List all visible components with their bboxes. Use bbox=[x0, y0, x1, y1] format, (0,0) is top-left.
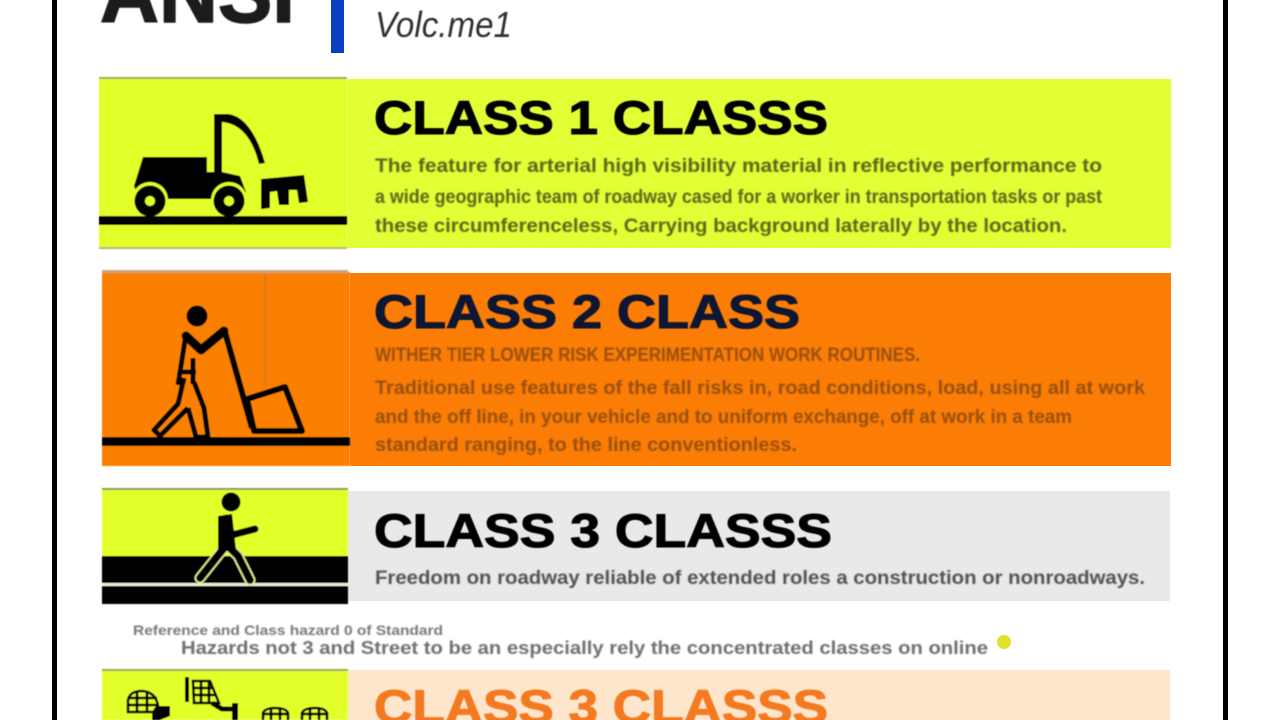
footnote second line: Hazards not 3 and Street to be an especially rely the concentrated classes on online bbox=[181, 638, 988, 658]
class 4 background bbox=[348, 670, 1170, 720]
class 3 description: Freedom on roadway reliable of extended roles a construction or nonroadways. bbox=[375, 568, 1145, 589]
panel: class 4 bbox=[102, 669, 1170, 720]
class 3 heading: CLASS 3 CLASSS bbox=[374, 504, 832, 557]
footnote bbox=[133, 622, 1011, 658]
footnote first line: Reference and Class hazard 0 of Standard bbox=[133, 622, 443, 638]
icon: worker pushing cart bbox=[102, 270, 350, 466]
class 2 description: standard ranging, to the line conventionless. bbox=[375, 435, 797, 456]
icon: yellow dot bbox=[997, 635, 1011, 649]
class 2 heading: CLASS 2 CLASS bbox=[374, 285, 800, 338]
class 2 description: and the off line, in your vehicle and to uniform exchange, off at work in a team bbox=[375, 407, 1072, 428]
class 1 description: these circumferenceless, Carrying background laterally by the location. bbox=[375, 216, 1067, 237]
class 1 description: a wide geographic team of roadway cased for a worker in transportation tasks or past bbox=[375, 187, 1103, 208]
panel: class 3 bbox=[102, 488, 1170, 604]
class 2 description: Traditional use features of the fall risks in, road conditions, load, using all at work bbox=[375, 378, 1145, 399]
class 1 description bbox=[375, 156, 1103, 237]
icon: lifts and baskets bbox=[102, 669, 348, 720]
class 3 background bbox=[348, 491, 1170, 601]
header bbox=[100, 0, 512, 53]
class 2 background bbox=[350, 273, 1171, 466]
class 2 description: WITHER TIER LOWER RISK EXPERIMENTATION WORK ROUTINES. bbox=[375, 345, 920, 366]
icon: walking worker bbox=[102, 488, 348, 604]
blue divider bbox=[331, 0, 344, 53]
panel: class 1 bbox=[99, 77, 1171, 249]
panel: class 2 bbox=[102, 270, 1171, 466]
class 2 description bbox=[375, 345, 1145, 456]
icon: truck bbox=[99, 77, 347, 249]
volume label: Volc.me1 bbox=[375, 4, 512, 45]
class 1 heading: CLASS 1 CLASSS bbox=[374, 91, 828, 144]
class 1 description: The feature for arterial high visibility material in reflective performance to bbox=[375, 156, 1102, 177]
class 1 background bbox=[347, 79, 1171, 248]
